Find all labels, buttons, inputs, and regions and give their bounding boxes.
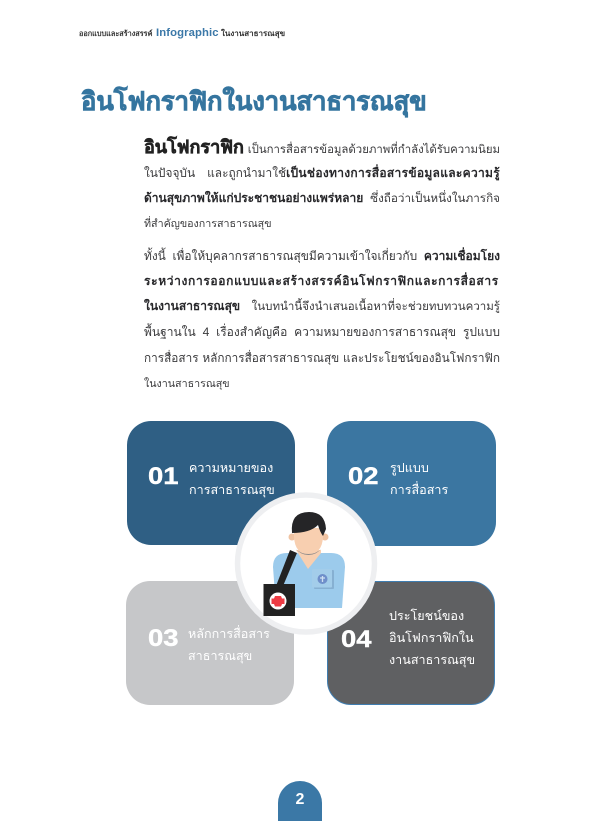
- text block: paragraph 1: ที่สำคัญของการสาธารณสุข: [144, 218, 272, 230]
- number 01: 01: [148, 463, 179, 490]
- label 01: ความหมายของ: [189, 461, 273, 475]
- card 03: communication principles: [126, 581, 294, 705]
- header line: [79, 27, 285, 39]
- text block: paragraph 2: การสื่อสาร หลักการสื่อสารสาธารณสุข และประโยชน์ของอินโฟกราฟิก: [144, 351, 500, 365]
- card 02: communication formats: [327, 421, 496, 546]
- card 04: benefits of infographics: [327, 581, 495, 705]
- text block: paragraph 2: ระหว่างการออกแบบและสร้างสรรค์อินโฟกราฟิกและการสื่อสาร: [144, 274, 499, 288]
- text block: paragraph 2: ในงานสาธารณสุข: [144, 378, 230, 390]
- label 04: ประโยชน์ของ: [389, 609, 464, 623]
- text block: paragraph 2: พื้นฐานใน 4 เรื่องสำคัญคือ ความหมายของการสาธารณสุข รูปแบบ: [144, 325, 500, 339]
- text block: paragraph 1: ด้านสุขภาพให้แก่ประชาชนอย่างแพร่หลาย ซึ่งถือว่าเป็นหนึ่งในภารกิจ: [144, 191, 500, 205]
- number 04: 04: [341, 626, 372, 653]
- label 03: สาธารณสุข: [188, 649, 252, 663]
- label 03: หลักการสื่อสาร: [188, 627, 270, 641]
- label 04: งานสาธารณสุข: [389, 653, 475, 667]
- label 02: [390, 461, 448, 497]
- white ring circle: [238, 495, 374, 632]
- label 01: [189, 461, 275, 498]
- header line: ในงานสาธารณสุข: [221, 29, 285, 38]
- center illustration: public health worker: [235, 492, 377, 634]
- header line: ออกแบบและสร้างสรรค์: [79, 29, 152, 38]
- label 02: การสื่อสาร: [390, 483, 448, 497]
- text block: paragraph 2: ในงานสาธารณสุข ในบทนำนี้จึงนำเสนอเนื้อหาที่จะช่วยทบทวนความรู้: [144, 299, 500, 313]
- number 03: 03: [148, 625, 179, 652]
- label 04: อินโฟกราฟิกใน: [389, 631, 474, 645]
- label 02: รูปแบบ: [390, 461, 429, 475]
- header line: Infographic: [156, 27, 219, 39]
- label 04: [389, 608, 475, 668]
- icon: person: [273, 512, 345, 608]
- card 01: meaning of public health: [127, 421, 295, 545]
- text block: paragraph 2: ทั้งนี้ เพื่อให้บุคลากรสาธารณสุขมีความเข้าใจเกี่ยวกับ ความเชื่อมโยง: [144, 249, 500, 263]
- page number tab: [278, 781, 322, 821]
- label 03: [188, 625, 270, 664]
- label 01: การสาธารณสุข: [189, 483, 275, 497]
- text block: paragraph 1: ในปัจจุบัน และถูกนำมาใช้เป็นช่องทางการสื่อสารข้อมูลและความรู้: [144, 166, 500, 180]
- icon: first-aid bag: [264, 550, 297, 616]
- title: อินโฟกราฟิกในงานสาธารณสุข: [81, 88, 427, 116]
- text block: paragraph 1: [144, 136, 500, 230]
- page number tab: 2: [296, 791, 304, 808]
- text block: paragraph 2: [144, 247, 500, 390]
- text block: paragraph 1: อินโฟกราฟิก เป็นการสื่อสารข้อมูลด้วยภาพที่กำลังได้รับความนิยม: [144, 137, 500, 157]
- number 02: 02: [348, 463, 379, 490]
